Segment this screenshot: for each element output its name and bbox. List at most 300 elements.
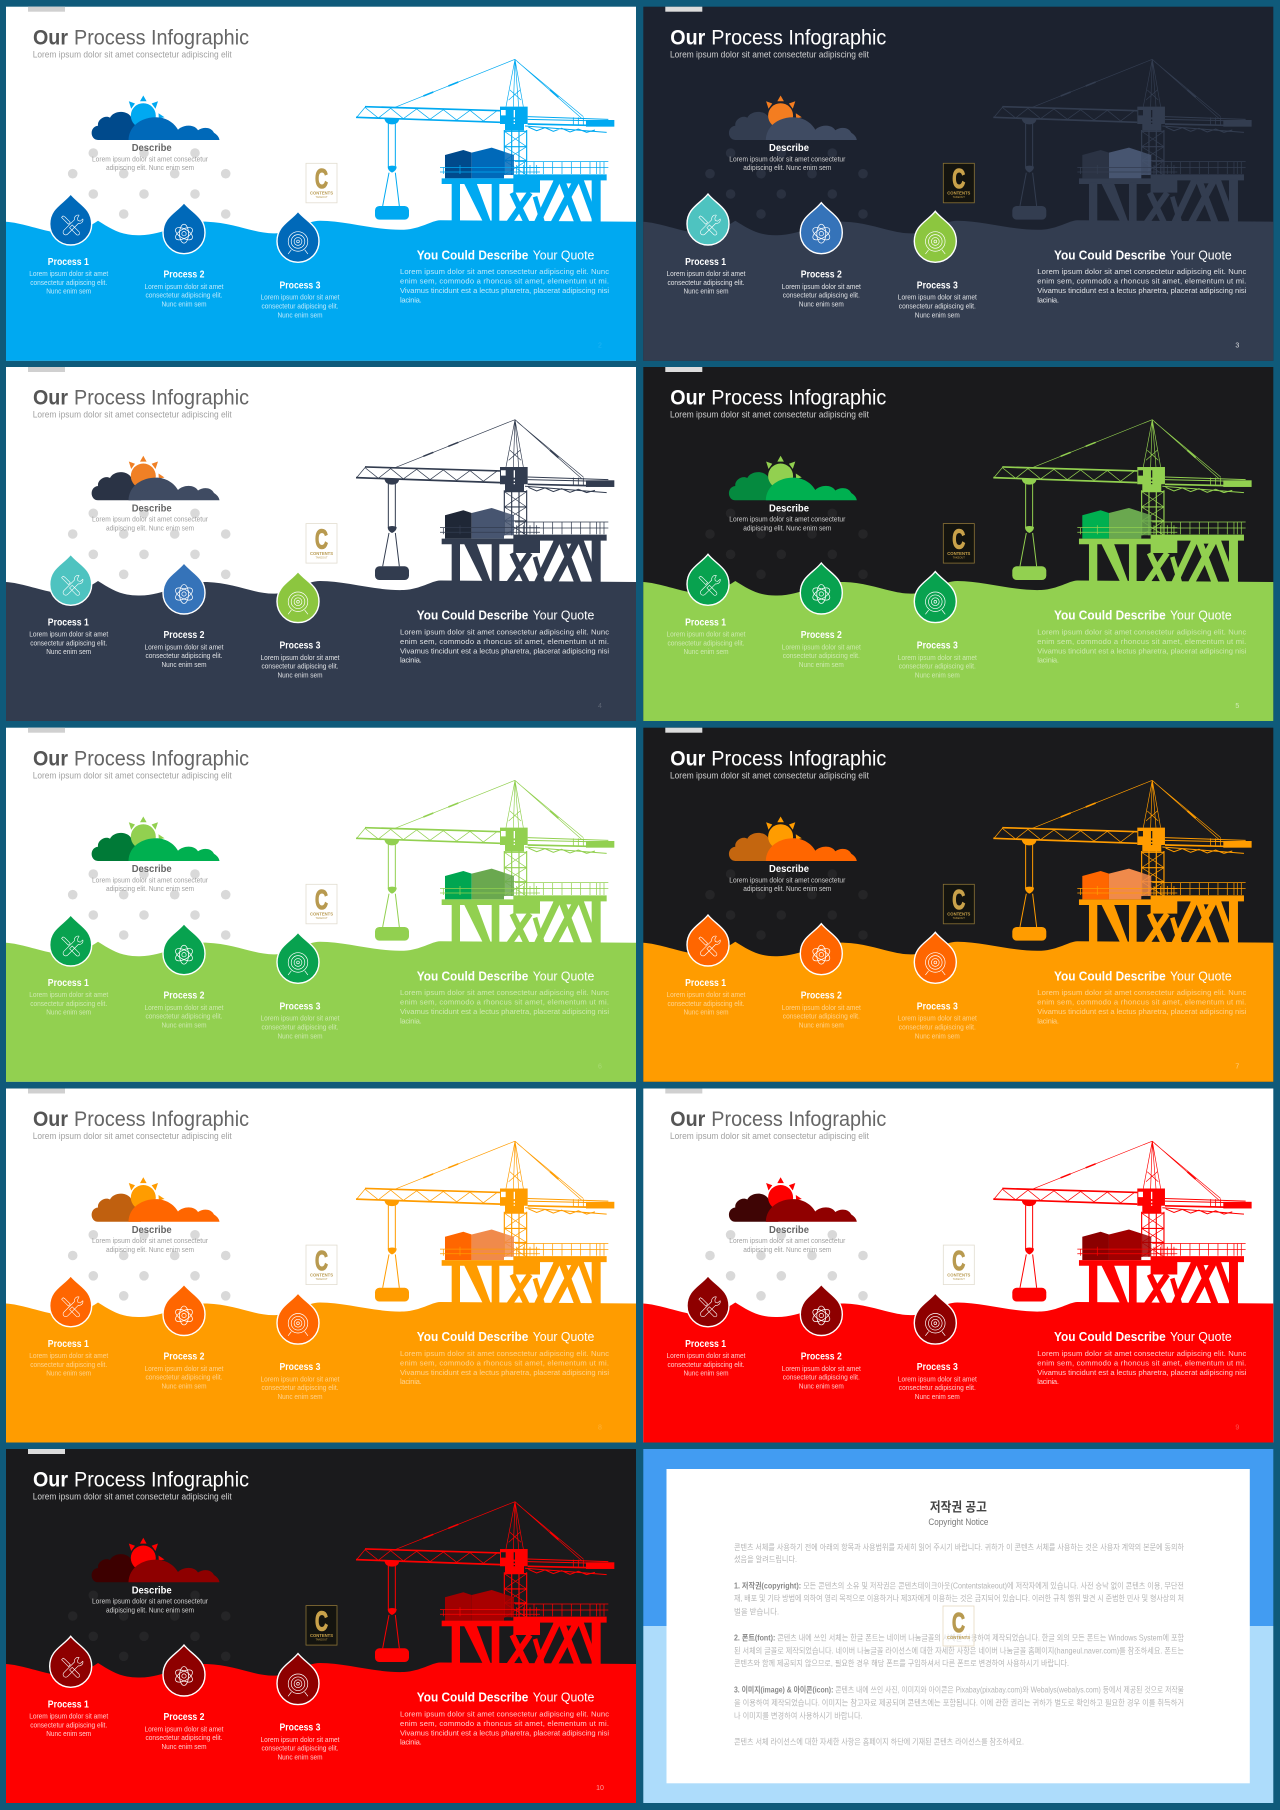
- title: Our: [33, 746, 69, 770]
- describe block: Describe: [132, 1225, 172, 1236]
- drop: process 3: [277, 211, 319, 262]
- quote paragraph: Lorem ipsum dolor sit amet consectetur adipiscing elit. Nunc: [400, 627, 609, 636]
- quote heading: You Could Describe: [417, 968, 528, 983]
- drop: process 2: [800, 203, 842, 254]
- describe block: Lorem ipsum dolor sit amet consectetur: [729, 1236, 846, 1245]
- crane and offshore platform: [356, 1502, 614, 1666]
- describe block: [92, 864, 208, 893]
- process 1 text: Lorem ipsum dolor sit amet: [29, 629, 108, 638]
- page number: 6: [598, 1064, 602, 1071]
- quote paragraph: lacinia.: [400, 656, 422, 665]
- process 1 text: consectetur adipiscing elit.: [667, 638, 744, 647]
- process 3 text: Process 3: [280, 640, 321, 652]
- process 2 text: Process 2: [164, 629, 205, 641]
- process 1 text: Nunc enim sem: [46, 647, 91, 656]
- process 3 text: Process 3: [917, 279, 958, 291]
- title: Our: [670, 25, 706, 49]
- quote paragraph: Vivamus tincidunt est a lectus pharetra, placerat adipiscing nisi: [400, 646, 609, 655]
- describe block: adipiscing elit. Nunc enim sem: [743, 523, 831, 532]
- describe block: Lorem ipsum dolor sit amet consectetur: [92, 1236, 208, 1245]
- drop: process 1: [687, 915, 729, 966]
- title: Process Infographic: [711, 25, 887, 49]
- subtitle: Lorem ipsum dolor sit amet consectetur adipiscing elit: [33, 770, 232, 781]
- describe block: adipiscing elit. Nunc enim sem: [106, 1245, 194, 1254]
- quote heading: [417, 1690, 594, 1705]
- process 2 text: Nunc enim sem: [162, 1742, 206, 1751]
- process 3 text: Nunc enim sem: [278, 1753, 322, 1762]
- process 1 text: Lorem ipsum dolor sit amet: [666, 629, 745, 638]
- quote paragraph: Lorem ipsum dolor sit amet consectetur adipiscing elit. Nunc: [1037, 627, 1247, 636]
- drop: process 3: [914, 211, 956, 262]
- quote heading: Your Quote: [533, 247, 594, 262]
- process 2 text: Lorem ipsum dolor sit amet: [782, 1364, 861, 1373]
- quote paragraph: enim sem, commodo a rhoncus sit amet, elementum ut mi.: [400, 1358, 609, 1368]
- quote heading: [1054, 1329, 1232, 1344]
- process 3 text: Lorem ipsum dolor sit amet: [260, 1014, 340, 1023]
- quote paragraph: lacinia.: [400, 1377, 422, 1386]
- process 2 text: consectetur adipiscing elit.: [146, 1733, 222, 1742]
- process 3 text: consectetur adipiscing elit.: [262, 1744, 338, 1753]
- subtitle: Lorem ipsum dolor sit amet consectetur adipiscing elit: [33, 1492, 232, 1503]
- quote paragraph: Lorem ipsum dolor sit amet consectetur adipiscing elit. Nunc: [400, 1349, 609, 1358]
- notice subheading: Copyright Notice: [928, 1517, 988, 1527]
- quote paragraph: [400, 988, 609, 1025]
- drop: process 3: [277, 572, 319, 623]
- quote paragraph: enim sem, commodo a rhoncus sit amet, elementum ut mi.: [400, 637, 609, 646]
- process 3 text: consectetur adipiscing elit.: [262, 1022, 338, 1031]
- drop: process 3: [914, 932, 956, 983]
- process 3 text: Nunc enim sem: [278, 671, 322, 680]
- quote paragraph: Vivamus tincidunt est a lectus pharetra, placerat adipiscing nisi: [1037, 286, 1247, 295]
- title: Our: [33, 1107, 69, 1131]
- process 3 text: Lorem ipsum dolor sit amet: [260, 1374, 340, 1384]
- subtitle: Lorem ipsum dolor sit amet consectetur adipiscing elit: [33, 410, 232, 421]
- process 3 text: Lorem ipsum dolor sit amet: [260, 1735, 340, 1744]
- subtitle: Lorem ipsum dolor sit amet consectetur adipiscing elit: [670, 770, 869, 781]
- process 3 text: Nunc enim sem: [915, 1031, 960, 1040]
- notice body: 된 서체의 글꼴로 제작되었습니다. 네이버 나눔글꼴 라이선스에 대한 자세한 사항은 네이버 나눔글꼴 홈페이지(hangeul.naver.com)를 참조하세요. 폰트는: [734, 1645, 1184, 1655]
- describe block: [729, 1225, 846, 1254]
- notice body: 1. 저작권(copyright): 모든 콘텐츠의 소유 및 저작권은 콘텐츠테이크아웃(Contentstakeout)에 저작자에게 있습니다. 사전 승낙 없이 콘텐츠 이용, 무단전: [734, 1580, 1184, 1590]
- process 1 text: consectetur adipiscing elit.: [667, 1360, 744, 1369]
- process 3 text: consectetur adipiscing elit.: [899, 1022, 976, 1031]
- panel: copyright notice: [643, 1449, 1273, 1803]
- describe block: adipiscing elit. Nunc enim sem: [106, 163, 194, 172]
- logo badge: CONTENTS: [947, 191, 971, 196]
- wave: [6, 941, 636, 1082]
- quote paragraph: Vivamus tincidunt est a lectus pharetra, placerat adipiscing nisi: [1037, 1368, 1247, 1377]
- describe block: Describe: [132, 143, 172, 154]
- wave: [643, 220, 1273, 361]
- process 3 text: [260, 1361, 340, 1401]
- logo badge: C: [952, 1245, 965, 1276]
- dot pattern: [705, 869, 868, 940]
- process 3 text: Nunc enim sem: [915, 310, 960, 319]
- quote paragraph: Vivamus tincidunt est a lectus pharetra, placerat adipiscing nisi: [1037, 646, 1247, 655]
- logo badge: [943, 524, 974, 563]
- title: Our: [33, 386, 69, 410]
- process 1 text: Process 1: [48, 1698, 89, 1710]
- describe block: Describe: [769, 1225, 809, 1236]
- quote paragraph: lacinia.: [400, 295, 422, 304]
- quote heading: You Could Describe: [1054, 1329, 1166, 1344]
- quote paragraph: [400, 267, 609, 304]
- drop: process 3: [914, 572, 956, 623]
- process 2 text: Nunc enim sem: [799, 660, 844, 669]
- process 1 text: [29, 1338, 108, 1378]
- logo badge: TAKEOUT: [953, 556, 965, 560]
- quote heading: [1054, 968, 1232, 983]
- quote paragraph: [1037, 988, 1247, 1025]
- watermark logo: CONTENTS: [947, 1635, 970, 1640]
- logo badge: [306, 163, 337, 203]
- process 3 text: Nunc enim sem: [278, 310, 322, 319]
- process 1 text: Nunc enim sem: [46, 287, 91, 296]
- process 1 text: [666, 256, 746, 296]
- process 2 text: Lorem ipsum dolor sit amet: [782, 1003, 861, 1012]
- process 2 text: Process 2: [801, 990, 842, 1002]
- logo badge: C: [315, 524, 328, 554]
- logo badge: C: [315, 884, 328, 915]
- process 2 text: [782, 1350, 861, 1390]
- quote heading: Your Quote: [533, 968, 594, 983]
- process 3 text: Nunc enim sem: [278, 1031, 322, 1040]
- icon: sun and clouds: [729, 1177, 857, 1222]
- process 3 text: Lorem ipsum dolor sit amet: [260, 653, 340, 662]
- process 3 text: [898, 1361, 977, 1401]
- process 1 text: consectetur adipiscing elit.: [667, 278, 744, 287]
- quote heading: Your Quote: [1170, 608, 1232, 623]
- process 3 text: Lorem ipsum dolor sit amet: [898, 293, 977, 302]
- process 2 text: Process 2: [164, 1711, 205, 1723]
- process 1 text: Process 1: [48, 616, 89, 628]
- process 1 text: Process 1: [48, 977, 89, 989]
- process 1 text: Nunc enim sem: [683, 647, 728, 656]
- describe block: adipiscing elit. Nunc enim sem: [743, 884, 831, 893]
- title: Process Infographic: [74, 386, 249, 410]
- logo badge: C: [952, 524, 965, 554]
- describe block: [729, 143, 846, 172]
- process 2 text: consectetur adipiscing elit.: [146, 291, 222, 300]
- page number: 3: [1235, 343, 1239, 350]
- quote paragraph: [1037, 627, 1247, 665]
- process 2 text: Lorem ipsum dolor sit amet: [144, 1003, 224, 1012]
- logo badge: CONTENTS: [310, 1633, 333, 1638]
- describe block: adipiscing elit. Nunc enim sem: [743, 1245, 831, 1254]
- process 2 text: [144, 269, 224, 309]
- quote paragraph: Lorem ipsum dolor sit amet consectetur adipiscing elit. Nunc: [1037, 267, 1247, 276]
- quote paragraph: Lorem ipsum dolor sit amet consectetur adipiscing elit. Nunc: [1037, 988, 1247, 997]
- process 1 text: [29, 256, 108, 296]
- process 2 text: Nunc enim sem: [799, 1021, 844, 1030]
- describe block: Lorem ipsum dolor sit amet consectetur: [92, 515, 208, 524]
- wave: [6, 1662, 636, 1803]
- notice body: 콘텐츠 서체 라이선스에 대한 자세한 사항은 홈페이지 하단에 기재된 콘텐츠 라이선스를 참조하세요.: [734, 1736, 1024, 1746]
- icon: sun and clouds: [92, 1177, 220, 1222]
- process 3 text: Process 3: [280, 1361, 321, 1373]
- describe block: adipiscing elit. Nunc enim sem: [743, 163, 831, 172]
- icon: sun and clouds: [92, 1538, 220, 1582]
- quote heading: [417, 968, 594, 983]
- process 2 text: Lorem ipsum dolor sit amet: [144, 642, 224, 651]
- process 3 text: Process 3: [280, 1000, 321, 1012]
- process 2 text: consectetur adipiscing elit.: [783, 651, 860, 660]
- process 2 text: Process 2: [164, 269, 205, 281]
- quote paragraph: lacinia.: [400, 1016, 422, 1025]
- logo badge: TAKEOUT: [315, 916, 328, 920]
- logo badge: [306, 1606, 337, 1645]
- logo badge: C: [952, 163, 965, 194]
- crane and offshore platform: [993, 780, 1252, 945]
- drop: process 1: [687, 1276, 729, 1327]
- describe block: Lorem ipsum dolor sit amet consectetur: [729, 515, 846, 524]
- process 1 text: Lorem ipsum dolor sit amet: [29, 990, 108, 999]
- process 3 text: consectetur adipiscing elit.: [899, 662, 976, 671]
- logo badge: CONTENTS: [947, 912, 971, 917]
- crane and offshore platform: [356, 420, 614, 584]
- page number: 7: [1235, 1064, 1239, 1071]
- quote paragraph: [400, 1349, 609, 1386]
- crane and offshore platform: [356, 59, 614, 224]
- process 1 text: Lorem ipsum dolor sit amet: [666, 990, 745, 999]
- quote paragraph: enim sem, commodo a rhoncus sit amet, elementum ut mi.: [400, 277, 609, 286]
- quote heading: You Could Describe: [417, 1329, 528, 1344]
- process 1 text: Process 1: [685, 1338, 726, 1350]
- dot pattern: [68, 508, 230, 579]
- describe block: [729, 503, 846, 532]
- title: Process Infographic: [711, 1107, 887, 1131]
- drop: process 1: [50, 1636, 92, 1687]
- quote heading: [417, 1329, 594, 1344]
- quote heading: Your Quote: [533, 1329, 594, 1344]
- process 2 text: Lorem ipsum dolor sit amet: [144, 1724, 224, 1733]
- describe block: Describe: [769, 864, 809, 875]
- quote paragraph: Lorem ipsum dolor sit amet consectetur adipiscing elit. Nunc: [400, 1709, 609, 1718]
- notice body: 재, 배포 및 기타 방법에 의하여 영리 목적으로 이용하거나 제3자에게 이용하는 것은 금지되어 있습니다. 이러한 규칙 행위 발견 시 준법한 민사 및 형사상의 처: [734, 1593, 1184, 1603]
- crane and offshore platform: [993, 420, 1252, 584]
- dot pattern: [68, 1230, 230, 1301]
- drop: process 2: [163, 924, 205, 975]
- process 3 text: consectetur adipiscing elit.: [899, 301, 976, 310]
- quote paragraph: Vivamus tincidunt est a lectus pharetra, placerat adipiscing nisi: [400, 1007, 609, 1016]
- process 2 text: Nunc enim sem: [162, 660, 206, 669]
- process 1 text: consectetur adipiscing elit.: [30, 278, 107, 287]
- quote paragraph: lacinia.: [1037, 656, 1059, 665]
- process 2 text: [144, 1711, 224, 1751]
- describe block: Lorem ipsum dolor sit amet consectetur: [92, 154, 208, 163]
- process 3 text: Lorem ipsum dolor sit amet: [898, 653, 977, 662]
- wave: [643, 1302, 1273, 1442]
- process 1 text: [29, 616, 108, 656]
- process 1 text: Process 1: [685, 616, 726, 628]
- quote heading: [1054, 608, 1232, 623]
- page number: 8: [598, 1424, 602, 1432]
- process 2 text: Nunc enim sem: [799, 1382, 844, 1390]
- process 3 text: [898, 640, 977, 680]
- process 2 text: Nunc enim sem: [162, 300, 206, 309]
- drop: process 1: [50, 554, 92, 605]
- drop: process 3: [277, 1293, 319, 1344]
- describe block: Describe: [769, 503, 809, 514]
- describe block: Describe: [769, 143, 809, 154]
- process 3 text: [898, 1000, 977, 1040]
- process 3 text: [260, 279, 340, 319]
- process 1 text: Nunc enim sem: [683, 287, 728, 296]
- quote heading: Your Quote: [1170, 1329, 1232, 1344]
- process 1 text: consectetur adipiscing elit.: [30, 999, 107, 1008]
- panel: green on white: [6, 728, 636, 1082]
- process 2 text: Process 2: [801, 629, 842, 641]
- describe block: [92, 503, 208, 532]
- describe block: Lorem ipsum dolor sit amet consectetur: [92, 875, 208, 884]
- quote paragraph: Lorem ipsum dolor sit amet consectetur adipiscing elit. Nunc: [400, 988, 609, 997]
- process 2 text: consectetur adipiscing elit.: [146, 1372, 222, 1382]
- dot pattern: [705, 148, 868, 219]
- logo badge: C: [315, 163, 328, 194]
- process 2 text: [782, 269, 861, 309]
- page number: 10: [596, 1785, 604, 1792]
- process 1 text: consectetur adipiscing elit.: [30, 638, 107, 647]
- title: Process Infographic: [74, 746, 249, 770]
- process 2 text: Process 2: [801, 1350, 842, 1362]
- quote paragraph: Lorem ipsum dolor sit amet consectetur adipiscing elit. Nunc: [400, 267, 609, 276]
- wave: [643, 941, 1273, 1082]
- panel: orange on white: [6, 1088, 636, 1442]
- process 1 text: Lorem ipsum dolor sit amet: [666, 1351, 745, 1360]
- quote heading: [1054, 247, 1232, 262]
- process 1 text: Nunc enim sem: [46, 1008, 91, 1017]
- process 1 text: Process 1: [48, 256, 89, 268]
- wave: [643, 580, 1273, 721]
- process 2 text: consectetur adipiscing elit.: [146, 1012, 222, 1021]
- logo badge: [943, 1245, 974, 1285]
- quote heading: Your Quote: [533, 1690, 594, 1705]
- process 1 text: Process 1: [685, 977, 726, 989]
- describe block: Describe: [132, 864, 172, 875]
- wave: [6, 220, 636, 361]
- process 3 text: Lorem ipsum dolor sit amet: [260, 293, 340, 302]
- process 2 text: [782, 629, 861, 669]
- logo badge: CONTENTS: [310, 1272, 333, 1278]
- process 1 text: Nunc enim sem: [46, 1368, 91, 1378]
- logo badge: CONTENTS: [310, 191, 333, 196]
- process 2 text: Process 2: [164, 990, 205, 1002]
- quote paragraph: enim sem, commodo a rhoncus sit amet, elementum ut mi.: [1037, 1358, 1246, 1368]
- quote heading: [417, 608, 594, 623]
- drop: process 1: [50, 194, 92, 245]
- process 2 text: [144, 990, 224, 1030]
- process 1 text: consectetur adipiscing elit.: [30, 1360, 107, 1369]
- quote heading: You Could Describe: [1054, 247, 1166, 262]
- process 3 text: Lorem ipsum dolor sit amet: [898, 1374, 977, 1384]
- notice body: [734, 1542, 1184, 1746]
- quote paragraph: [1037, 1349, 1247, 1386]
- describe block: adipiscing elit. Nunc enim sem: [106, 884, 194, 893]
- wave: [6, 1302, 636, 1442]
- notice body: 콘텐츠와 함께 제공되지 않으므로, 필요한 경우 해당 폰트를 구입하셔서 다른 폰트로 변경하여 사용하시기 바랍니다.: [734, 1658, 1069, 1668]
- title: Our: [33, 25, 69, 49]
- logo badge: TAKEOUT: [953, 916, 965, 920]
- panel: orange on black: [643, 728, 1273, 1082]
- process 1 text: Lorem ipsum dolor sit amet: [666, 269, 745, 278]
- quote heading: Your Quote: [533, 608, 594, 623]
- logo badge: TAKEOUT: [953, 195, 965, 199]
- process 3 text: Process 3: [917, 1361, 958, 1373]
- quote paragraph: enim sem, commodo a rhoncus sit amet, elementum ut mi.: [1037, 277, 1246, 286]
- process 1 text: Process 1: [48, 1338, 89, 1350]
- process 2 text: Nunc enim sem: [162, 1021, 206, 1030]
- process 3 text: [260, 1722, 340, 1762]
- dot pattern: [705, 1230, 868, 1301]
- quote heading: Your Quote: [1170, 968, 1232, 983]
- title: Process Infographic: [74, 1468, 249, 1492]
- drop: process 1: [687, 554, 729, 605]
- process 2 text: Lorem ipsum dolor sit amet: [144, 1364, 224, 1373]
- logo badge: CONTENTS: [310, 912, 333, 917]
- logo badge: C: [315, 1606, 328, 1636]
- quote paragraph: Vivamus tincidunt est a lectus pharetra, placerat adipiscing nisi: [400, 1368, 609, 1377]
- dot pattern: [705, 508, 868, 579]
- logo badge: TAKEOUT: [315, 1277, 328, 1281]
- process 1 text: Lorem ipsum dolor sit amet: [29, 269, 108, 278]
- notice body: 콘텐츠 서체를 사용하기 전에 아래의 항목과 사용범위를 자세히 읽어 주시기 바랍니다. 귀하가 이 콘텐츠 서체를 사용하는 것은 사용자 계약의 본문에 동의하: [734, 1542, 1184, 1552]
- process 3 text: [260, 640, 340, 680]
- describe block: adipiscing elit. Nunc enim sem: [106, 523, 194, 532]
- process 1 text: consectetur adipiscing elit.: [667, 999, 744, 1008]
- describe block: Describe: [132, 1585, 172, 1596]
- icon: sun and clouds: [92, 816, 220, 861]
- process 2 text: [144, 629, 224, 669]
- notice body: 셨음을 알려드립니다.: [734, 1554, 797, 1564]
- subtitle: Lorem ipsum dolor sit amet consectetur adipiscing elit: [670, 49, 869, 60]
- subtitle: Lorem ipsum dolor sit amet consectetur adipiscing elit: [33, 49, 232, 60]
- process 3 text: consectetur adipiscing elit.: [262, 1383, 338, 1392]
- process 2 text: consectetur adipiscing elit.: [146, 651, 222, 660]
- crane and offshore platform: [356, 1141, 614, 1306]
- drop: process 2: [800, 563, 842, 614]
- process 2 text: [782, 990, 861, 1030]
- panel: green on black: [643, 367, 1273, 721]
- notice body: 벌을 받습니다.: [734, 1606, 779, 1616]
- quote paragraph: lacinia.: [1037, 1377, 1059, 1386]
- describe block: [729, 864, 846, 893]
- process 2 text: Lorem ipsum dolor sit amet: [144, 282, 224, 291]
- quote paragraph: lacinia.: [1037, 295, 1059, 304]
- subtitle: Lorem ipsum dolor sit amet consectetur adipiscing elit: [670, 1131, 869, 1142]
- describe block: [92, 1585, 208, 1614]
- process 3 text: Process 3: [280, 279, 321, 291]
- dot pattern: [68, 869, 230, 940]
- quote paragraph: enim sem, commodo a rhoncus sit amet, elementum ut mi.: [1037, 637, 1246, 646]
- page number: 4: [598, 703, 602, 710]
- drop: process 2: [163, 1284, 205, 1336]
- process 2 text: Lorem ipsum dolor sit amet: [782, 642, 861, 651]
- logo badge: CONTENTS: [947, 1272, 971, 1278]
- title: Process Infographic: [711, 746, 887, 770]
- drop: process 1: [50, 915, 92, 966]
- quote heading: You Could Describe: [417, 247, 528, 262]
- drop: process 3: [277, 1654, 319, 1705]
- quote heading: [417, 247, 594, 262]
- page number: 5: [1235, 703, 1239, 710]
- process 3 text: consectetur adipiscing elit.: [262, 662, 338, 671]
- quote paragraph: lacinia.: [400, 1738, 422, 1747]
- process 2 text: consectetur adipiscing elit.: [783, 1012, 860, 1021]
- icon: sun and clouds: [729, 456, 857, 500]
- quote paragraph: Vivamus tincidunt est a lectus pharetra, placerat adipiscing nisi: [400, 1728, 609, 1737]
- subtitle: Lorem ipsum dolor sit amet consectetur adipiscing elit: [670, 410, 869, 421]
- crane and offshore platform: [356, 780, 614, 945]
